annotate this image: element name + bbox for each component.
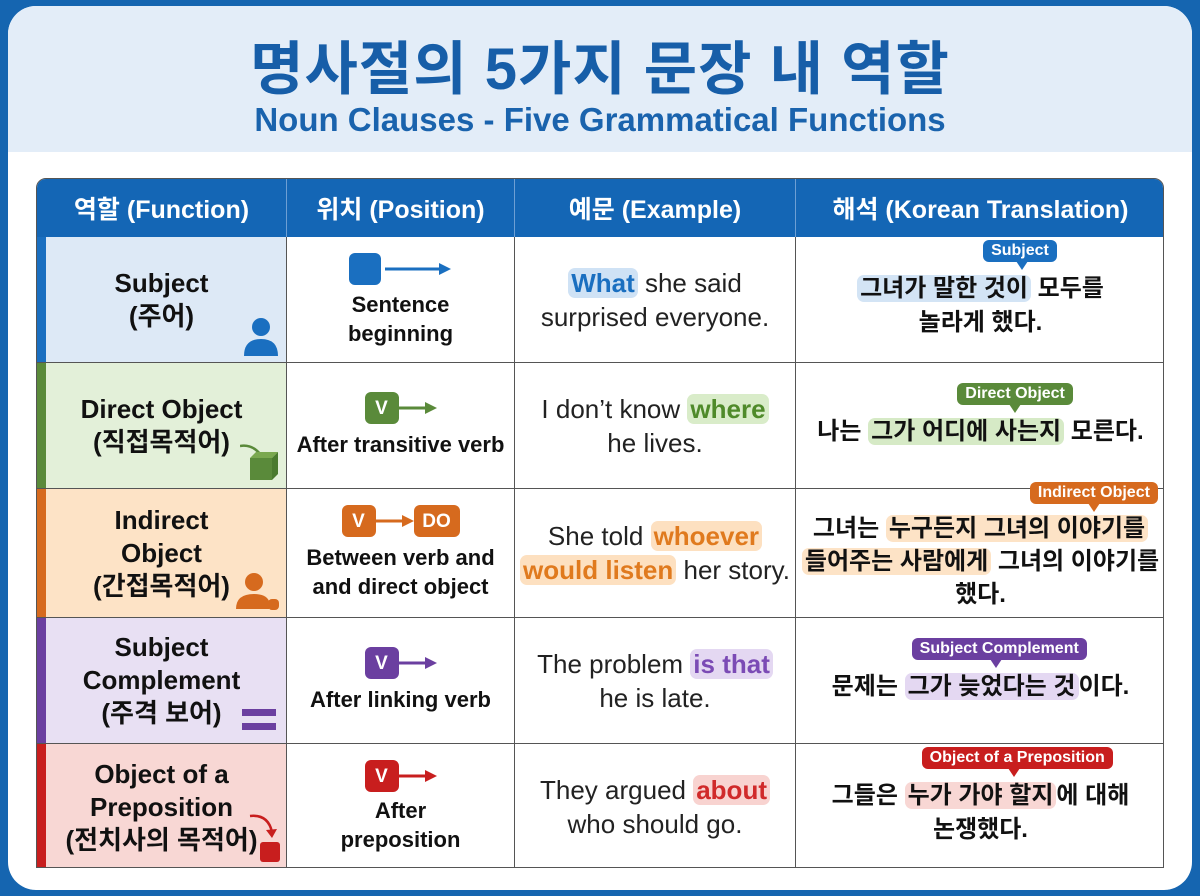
row 3 position xyxy=(287,489,515,618)
row 2 example: I don’t know where xyxy=(541,394,766,424)
row 2 example: he lives. xyxy=(607,428,703,458)
row 5 translation: 논쟁했다. xyxy=(933,816,1028,843)
row 5 example: who should go. xyxy=(568,809,742,839)
row 1 translation: 그녀가 말한 것이 모두를 xyxy=(860,274,1104,302)
row 1 translation: 놀라게 했다. xyxy=(919,308,1042,336)
row 3 translation: 그녀는 누구든지 그녀의 이야기를 xyxy=(813,514,1145,542)
row 3 function: indirect object: Object xyxy=(121,538,202,568)
row 5 position: preposition xyxy=(341,827,460,852)
row 5 example: They argued about xyxy=(540,775,767,805)
icon: person with hand xyxy=(236,573,279,610)
row 4 example: The problem is that xyxy=(537,648,770,678)
row 1 translation: Subject xyxy=(991,242,1049,258)
row 4 function: subject complement: Complement xyxy=(83,665,240,695)
row 2 translation xyxy=(796,363,1165,489)
row 2 position: V xyxy=(375,398,388,418)
row 1 position xyxy=(287,237,515,363)
row 1 example: surprised everyone. xyxy=(541,302,769,332)
row 2 translation: 나는 그가 어디에 사는지 모른다. xyxy=(817,418,1144,444)
header: function: 역할 (Function) xyxy=(74,196,249,224)
row 5 function: object of a preposition: Object of a xyxy=(94,758,229,788)
row 5 translation: 그들은 누가 가야 할지에 대해 xyxy=(832,782,1129,809)
row 2 position: After transitive verb xyxy=(297,432,504,457)
row 1 translation xyxy=(796,237,1165,363)
row 3 translation: 들어주는 사람에게 그녀의 이야기를 xyxy=(805,548,1159,574)
header band xyxy=(8,6,1192,152)
header: position: 위치 (Position) xyxy=(316,196,485,224)
row 5 example xyxy=(515,744,796,870)
row 1 position: beginning xyxy=(348,320,453,346)
title: 명사절의 5가지 문장 내 역할 xyxy=(250,37,950,102)
subtitle: Noun Clauses - Five Grammatical Functions xyxy=(254,101,946,138)
row 5 position: V xyxy=(375,766,388,786)
row 5 function: object of a preposition: Preposition xyxy=(90,792,233,822)
row 1 function: subject: (주어) xyxy=(129,300,194,330)
row 5 function: object of a preposition xyxy=(37,744,287,870)
row 3 example xyxy=(515,489,796,618)
row 4 translation xyxy=(796,618,1165,744)
row 4 translation: Subject Complement xyxy=(920,640,1079,656)
row 4 function: subject complement: (주격 보어) xyxy=(101,698,222,728)
row 5 translation: Object of a Preposition xyxy=(930,749,1105,766)
row 5 function: object of a preposition: (전치사의 목적어) xyxy=(66,824,257,854)
row 5 position: After xyxy=(375,798,426,823)
row 3 translation xyxy=(796,489,1165,618)
row 2 function: direct object: (직접목적어) xyxy=(93,426,230,456)
row 2 example xyxy=(515,363,796,489)
row 4 function: subject complement xyxy=(37,618,287,744)
row 2 function: direct object xyxy=(37,363,287,489)
icon: person xyxy=(244,318,278,356)
row 4 example: he is late. xyxy=(599,682,711,712)
header: function xyxy=(37,179,287,237)
row 3 example: She told whoever xyxy=(548,521,759,551)
icon: equals xyxy=(242,709,276,730)
row 2 position xyxy=(287,363,515,489)
row 2 translation: Direct Object xyxy=(965,384,1065,402)
row 3 position: V xyxy=(352,510,365,532)
row 3 function: indirect object: (간접목적어) xyxy=(93,570,230,600)
row 1 function: subject: Subject xyxy=(115,268,208,298)
icon: arrow into box xyxy=(250,814,280,862)
row 3 position: and direct object xyxy=(312,574,489,599)
header: translation: 해석 (Korean Translation) xyxy=(832,196,1129,224)
row 3 function: indirect object: Indirect xyxy=(115,504,208,534)
table xyxy=(36,178,1164,868)
row 3 translation: Indirect Object xyxy=(1038,484,1150,500)
header: translation xyxy=(796,179,1165,237)
row 1 example: What she said xyxy=(571,268,742,298)
row 4 function: subject complement: Subject xyxy=(115,632,208,662)
row 3 translation: 했다. xyxy=(955,580,1006,608)
row 3 position: Between verb and xyxy=(306,545,495,570)
row 1 function: subject xyxy=(37,237,287,363)
row 2 function: direct object: Direct Object xyxy=(81,394,242,424)
row 5 translation xyxy=(832,747,1129,843)
row 4 position: V xyxy=(375,652,388,674)
row 4 translation: 문제는 그가 늦었다는 것이다. xyxy=(832,672,1129,700)
header: example: 예문 (Example) xyxy=(569,196,741,224)
row 3 example: would listen her story. xyxy=(523,555,790,585)
header: position xyxy=(287,179,515,237)
row 3 position: DO xyxy=(422,510,451,532)
icon: box xyxy=(240,444,278,480)
row 5 position xyxy=(287,744,515,870)
row 3 function: indirect object xyxy=(37,489,287,618)
row 1 example xyxy=(515,237,796,363)
row 4 example xyxy=(515,618,796,744)
row 4 position: After linking verb xyxy=(310,687,491,712)
row 4 position xyxy=(287,618,515,744)
header: example xyxy=(515,179,796,237)
row 1 position: Sentence xyxy=(352,292,449,316)
